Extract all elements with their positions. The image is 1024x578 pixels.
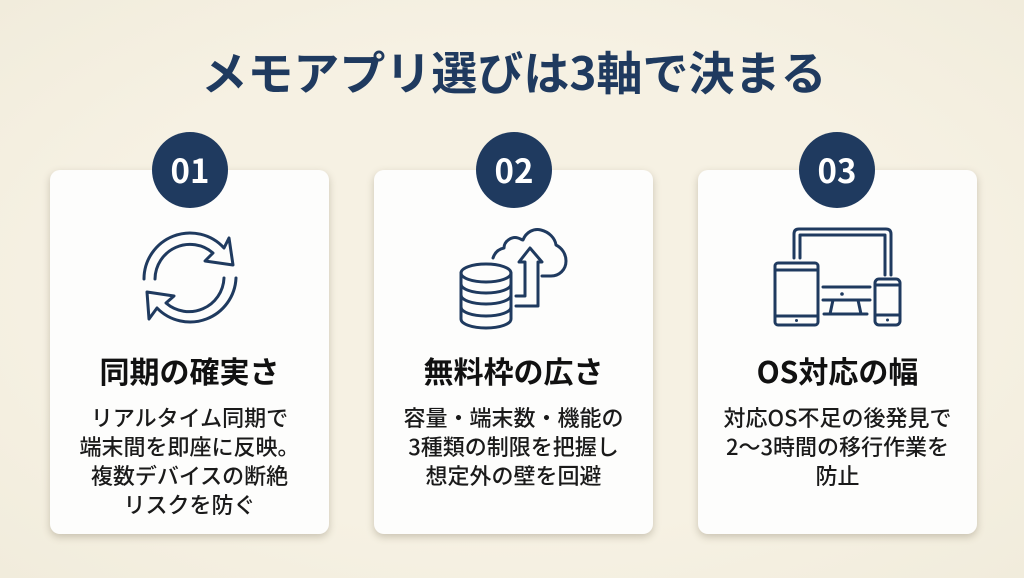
text: OS support description: 防止 — [815, 459, 860, 491]
panel: free tier — [374, 170, 653, 534]
heading: OS support: OS対応の幅 — [757, 348, 918, 392]
text: sync description: リスクを防ぐ — [123, 488, 256, 520]
text: sync description: 端末間を即座に反映。 — [79, 430, 300, 462]
badge 01 — [152, 132, 228, 208]
text: free tier description — [403, 401, 624, 491]
text: OS support description: 2〜3時間の移行作業を — [726, 430, 949, 462]
title: メモアプリ選びは3軸で決まる — [201, 38, 827, 104]
badge 02 — [476, 132, 552, 208]
panel: OS support — [698, 170, 977, 534]
text: sync description — [79, 401, 300, 520]
text: free tier description: 容量・端末数・機能の — [403, 401, 624, 433]
badge 01: 01 — [171, 145, 209, 193]
badge 03: 03 — [818, 145, 856, 193]
badge 03 — [799, 132, 875, 208]
text: OS support description — [724, 401, 951, 491]
heading: free tier: 無料枠の広さ — [424, 348, 604, 392]
panel: sync reliability — [50, 170, 329, 534]
heading: sync reliability: 同期の確実さ — [100, 348, 280, 392]
text: sync description: リアルタイム同期で — [91, 401, 288, 433]
text: free tier description: 3種類の制限を把握し — [408, 430, 619, 462]
text: OS support description: 対応OS不足の後発見で — [724, 401, 951, 433]
text: free tier description: 想定外の壁を回避 — [425, 459, 602, 491]
text: sync description: 複数デバイスの断絶 — [91, 459, 288, 491]
badge 02: 02 — [495, 145, 533, 193]
